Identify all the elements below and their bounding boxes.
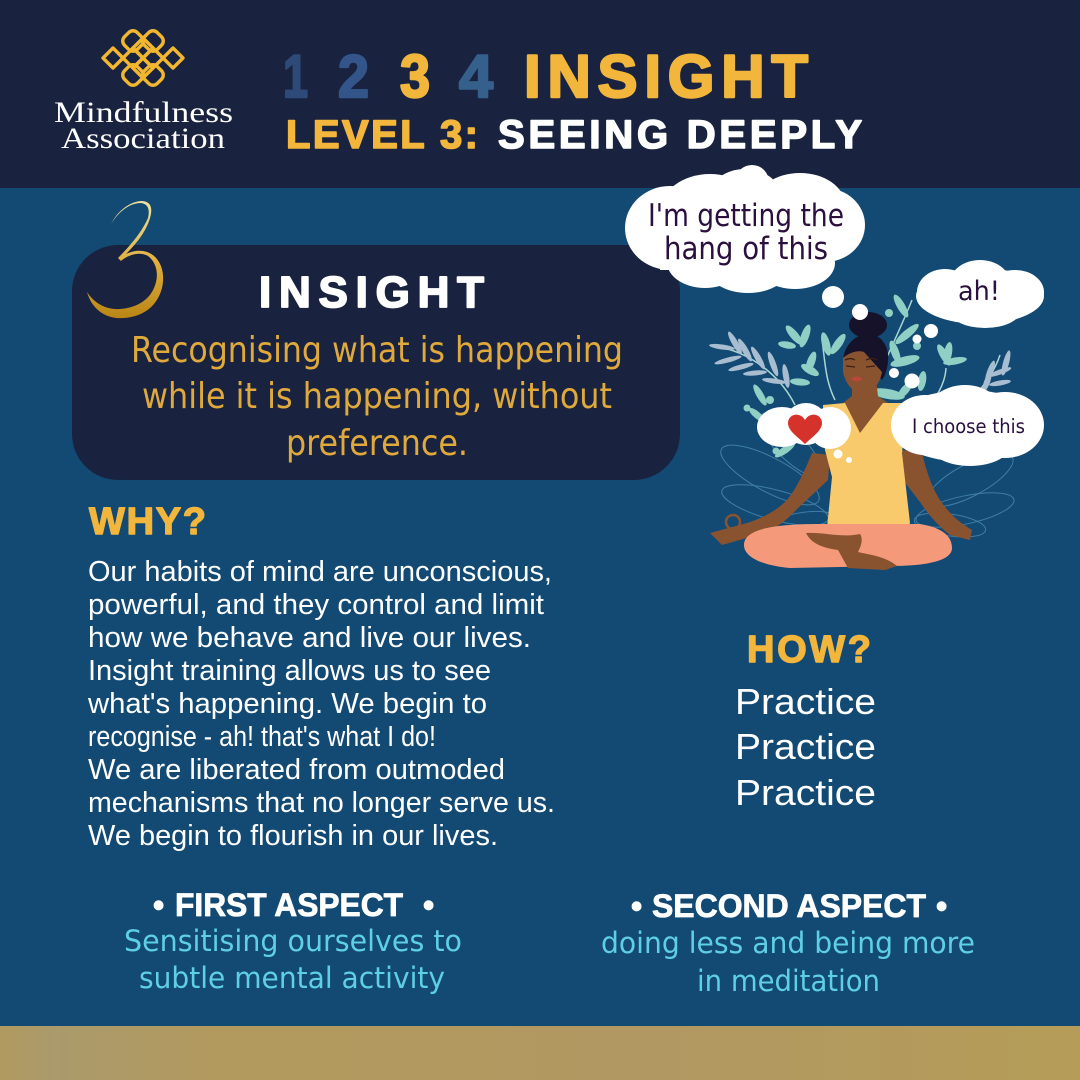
heading: second aspect: • <box>936 888 947 924</box>
title: 1 2 3 4 INSIGHT <box>283 43 808 110</box>
background line leaves <box>713 405 1020 543</box>
first aspect description: subtle mental activity <box>139 961 445 995</box>
face <box>843 351 882 393</box>
title: 1 2 3 4 INSIGHT: 4 <box>459 43 494 110</box>
logo wordmark: Association <box>61 122 225 155</box>
heading: first aspect: • <box>153 887 164 923</box>
body text: recognise - ah! that's what I do! <box>88 721 436 753</box>
body text: what's happening. We begin to <box>87 688 487 720</box>
lips <box>852 377 862 381</box>
hair <box>843 312 888 380</box>
panel: insight definition <box>72 201 680 480</box>
body text <box>87 556 555 852</box>
definition text: while it is happening, without <box>142 376 612 417</box>
second aspect description <box>601 926 975 998</box>
first aspect description <box>124 924 462 995</box>
neck and shoulders <box>843 380 888 436</box>
body text: how we behave and live our lives. <box>88 622 531 654</box>
footer band <box>0 1026 1080 1080</box>
definition text: preference. <box>286 423 468 464</box>
panel background <box>72 245 680 480</box>
feet <box>806 533 897 570</box>
cloud: heart <box>757 403 851 449</box>
teal and grey leaf sprays <box>709 293 1012 460</box>
cloud: I choose this <box>891 385 1044 466</box>
body text: mechanisms that no longer serve us. <box>88 787 555 819</box>
first aspect <box>124 887 462 995</box>
practice list: Practice <box>735 726 876 767</box>
second aspect description: in meditation <box>697 964 880 998</box>
section: how <box>735 629 876 813</box>
heading: second aspect: • <box>631 888 642 924</box>
heading: second aspect: SECOND ASPECT <box>652 888 926 924</box>
thought bubbles <box>822 286 938 463</box>
cloud: I'm getting the hang of this <box>625 165 865 293</box>
icon: calligraphic number 3 <box>87 201 163 318</box>
body text: We are liberated from outmoded <box>88 754 505 786</box>
heading: how: HOW? <box>747 629 871 671</box>
subtitle: Level 3: Seeing Deeply: LEVEL 3: <box>286 113 478 157</box>
legs <box>744 524 952 568</box>
cloud text: I'm getting the <box>648 198 844 234</box>
heading: first aspect: FIRST ASPECT <box>175 887 403 923</box>
header band <box>0 0 1080 188</box>
cloud text: ah! <box>958 276 1000 307</box>
title: 1 2 3 4 INSIGHT: 3 <box>400 43 430 110</box>
first aspect description: Sensitising ourselves to <box>124 924 462 958</box>
second aspect description: doing less and being more <box>601 926 975 960</box>
practice list: Practice <box>735 772 876 813</box>
icon: endless knot <box>103 28 183 88</box>
section: why <box>87 501 555 852</box>
icon: heart <box>788 415 822 444</box>
cloud text: I choose this <box>912 415 1025 438</box>
cloud text: hang of this <box>664 231 828 267</box>
illustration: meditating woman with thought clouds <box>625 165 1044 570</box>
logo wordmark <box>54 96 233 155</box>
definition text <box>131 330 623 464</box>
heading: why: WHY? <box>89 501 206 543</box>
practice list: Practice <box>735 681 876 722</box>
body text: powerful, and they control and limit <box>88 589 544 621</box>
logo wordmark: Mindfulness <box>54 96 233 129</box>
logo: Mindfulness Association <box>54 28 233 155</box>
body text: We begin to flourish in our lives. <box>88 820 498 852</box>
subtitle: Level 3: Seeing Deeply <box>286 113 862 157</box>
body text: Our habits of mind are unconscious, <box>88 556 552 588</box>
eyes and brows <box>845 358 877 367</box>
practice list <box>735 681 876 813</box>
panel heading: INSIGHT <box>259 268 484 317</box>
title: 1 2 3 4 INSIGHT: 2 <box>338 43 369 110</box>
shirt <box>823 403 910 528</box>
title: 1 2 3 4 INSIGHT: 1 <box>283 43 308 110</box>
cloud text <box>648 198 844 267</box>
definition text: Recognising what is happening <box>131 330 623 371</box>
second aspect <box>601 888 975 998</box>
arms <box>710 450 972 545</box>
woman figure <box>710 312 972 570</box>
hand ring <box>726 515 740 529</box>
body text: Insight training allows us to see <box>88 655 491 687</box>
heading: first aspect: • <box>423 887 434 923</box>
subtitle: Level 3: Seeing Deeply: SEEING DEEPLY <box>498 113 862 157</box>
title: 1 2 3 4 INSIGHT: INSIGHT <box>524 43 808 110</box>
cloud: ah! <box>916 260 1044 328</box>
